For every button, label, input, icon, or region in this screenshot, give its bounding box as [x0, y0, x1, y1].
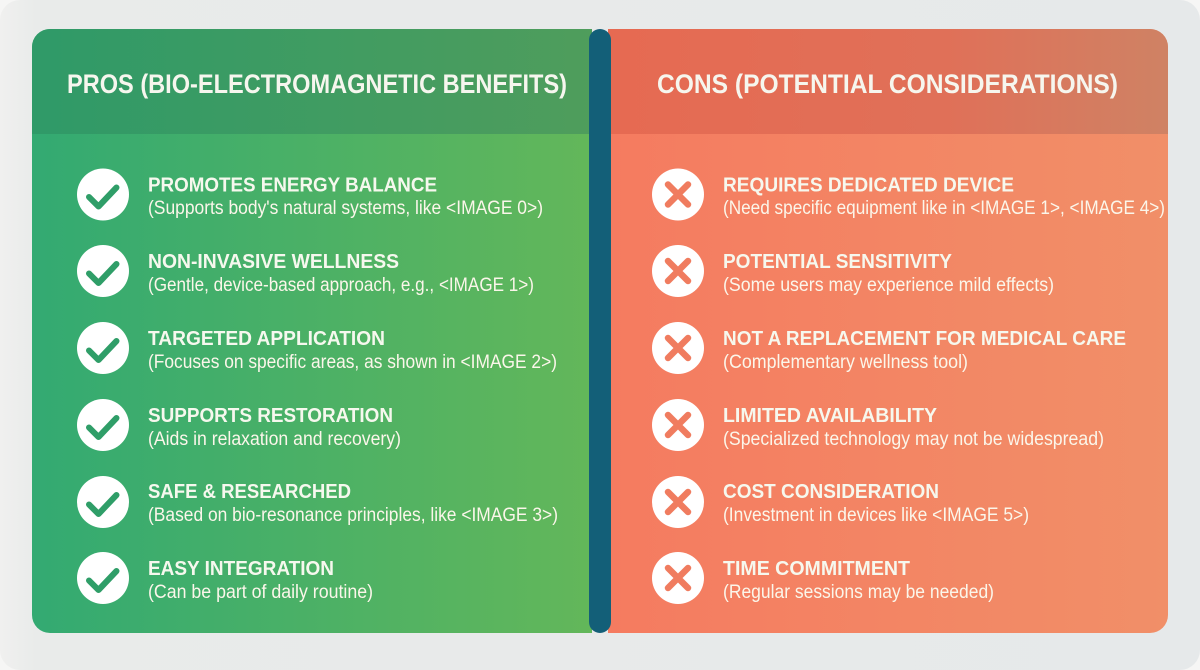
pro item 6 [77, 552, 373, 604]
pro 4 text: SUPPORTS RESTORATION [148, 404, 393, 427]
panel: pros [32, 29, 592, 633]
con item 4 [652, 399, 1104, 451]
pro 1 text: (Supports body's natural systems, like <IMAGE 0>) [148, 198, 543, 219]
pro 1 text [148, 174, 543, 219]
pro 2 text: (Gentle, device-based approach, e.g., <IMAGE 1>) [148, 275, 534, 296]
con 2 text [723, 250, 1054, 296]
con 6 text: TIME COMMITMENT [723, 557, 910, 580]
pros header band [32, 29, 592, 134]
pro 5 text [148, 480, 558, 526]
con 2 text: POTENTIAL SENSITIVITY [723, 250, 952, 273]
pro 2 text [148, 250, 534, 296]
con 3 text [723, 327, 1126, 373]
con 6 text [723, 557, 994, 603]
pro 5 text: (Based on bio-resonance principles, like <IMAGE 3>) [148, 505, 558, 526]
con item 5 [652, 476, 1029, 528]
con 3 text: NOT A REPLACEMENT FOR MEDICAL CARE [723, 327, 1126, 350]
pro item 2 [77, 245, 534, 297]
con item 1 [652, 168, 1165, 220]
con 4 text: (Specialized technology may not be widespread) [723, 429, 1104, 450]
icon: cross [652, 399, 704, 451]
icon: check [77, 245, 129, 297]
con 3 text: (Complementary wellness tool) [723, 352, 968, 373]
icon: check [77, 322, 129, 374]
con 5 text [723, 480, 1029, 526]
icon: check [77, 476, 129, 528]
con 5 text: COST CONSIDERATION [723, 480, 939, 503]
icon: check [77, 552, 129, 604]
con 2 text: (Some users may experience mild effects) [723, 275, 1054, 296]
center divider [589, 29, 611, 633]
pro 6 text: (Can be part of daily routine) [148, 582, 373, 603]
con 6 text: (Regular sessions may be needed) [723, 582, 994, 603]
pro item 5 [77, 476, 558, 528]
con 1 text: REQUIRES DEDICATED DEVICE [723, 174, 1014, 196]
pro 4 text [148, 404, 401, 450]
icon: cross [652, 322, 704, 374]
pro item 1 [77, 168, 543, 220]
pro 3 text: TARGETED APPLICATION [148, 327, 385, 350]
pro 5 text: SAFE & RESEARCHED [148, 480, 351, 503]
con item 6 [652, 552, 994, 604]
icon: cross [652, 552, 704, 604]
pro item 4 [77, 399, 401, 451]
icon: cross [652, 476, 704, 528]
con 1 text [723, 174, 1165, 219]
icon: cross [652, 245, 704, 297]
pro 3 text [148, 327, 557, 373]
heading: cons: CONS (POTENTIAL CONSIDERATIONS) [657, 69, 1118, 99]
panel: cons [608, 29, 1168, 633]
pro 3 text: (Focuses on specific areas, as shown in <IMAGE 2>) [148, 352, 557, 373]
con 4 text: LIMITED AVAILABILITY [723, 404, 937, 427]
con 1 text: (Need specific equipment like in <IMAGE 1>, <IMAGE 4>) [723, 198, 1165, 219]
heading: pros: PROS (BIO-ELECTROMAGNETIC BENEFITS) [67, 69, 567, 99]
pro 6 text [148, 557, 373, 603]
con item 2 [652, 245, 1054, 297]
con 4 text [723, 404, 1104, 450]
icon: check [77, 399, 129, 451]
icon: check [77, 168, 129, 220]
cons header band [608, 29, 1168, 134]
pro 1 text: PROMOTES ENERGY BALANCE [148, 174, 437, 196]
pro item 3 [77, 322, 557, 374]
con item 3 [652, 322, 1126, 374]
con 5 text: (Investment in devices like <IMAGE 5>) [723, 505, 1029, 526]
pro 2 text: NON-INVASIVE WELLNESS [148, 250, 399, 273]
icon: cross [652, 168, 704, 220]
pro 4 text: (Aids in relaxation and recovery) [148, 429, 401, 450]
pro 6 text: EASY INTEGRATION [148, 557, 334, 580]
